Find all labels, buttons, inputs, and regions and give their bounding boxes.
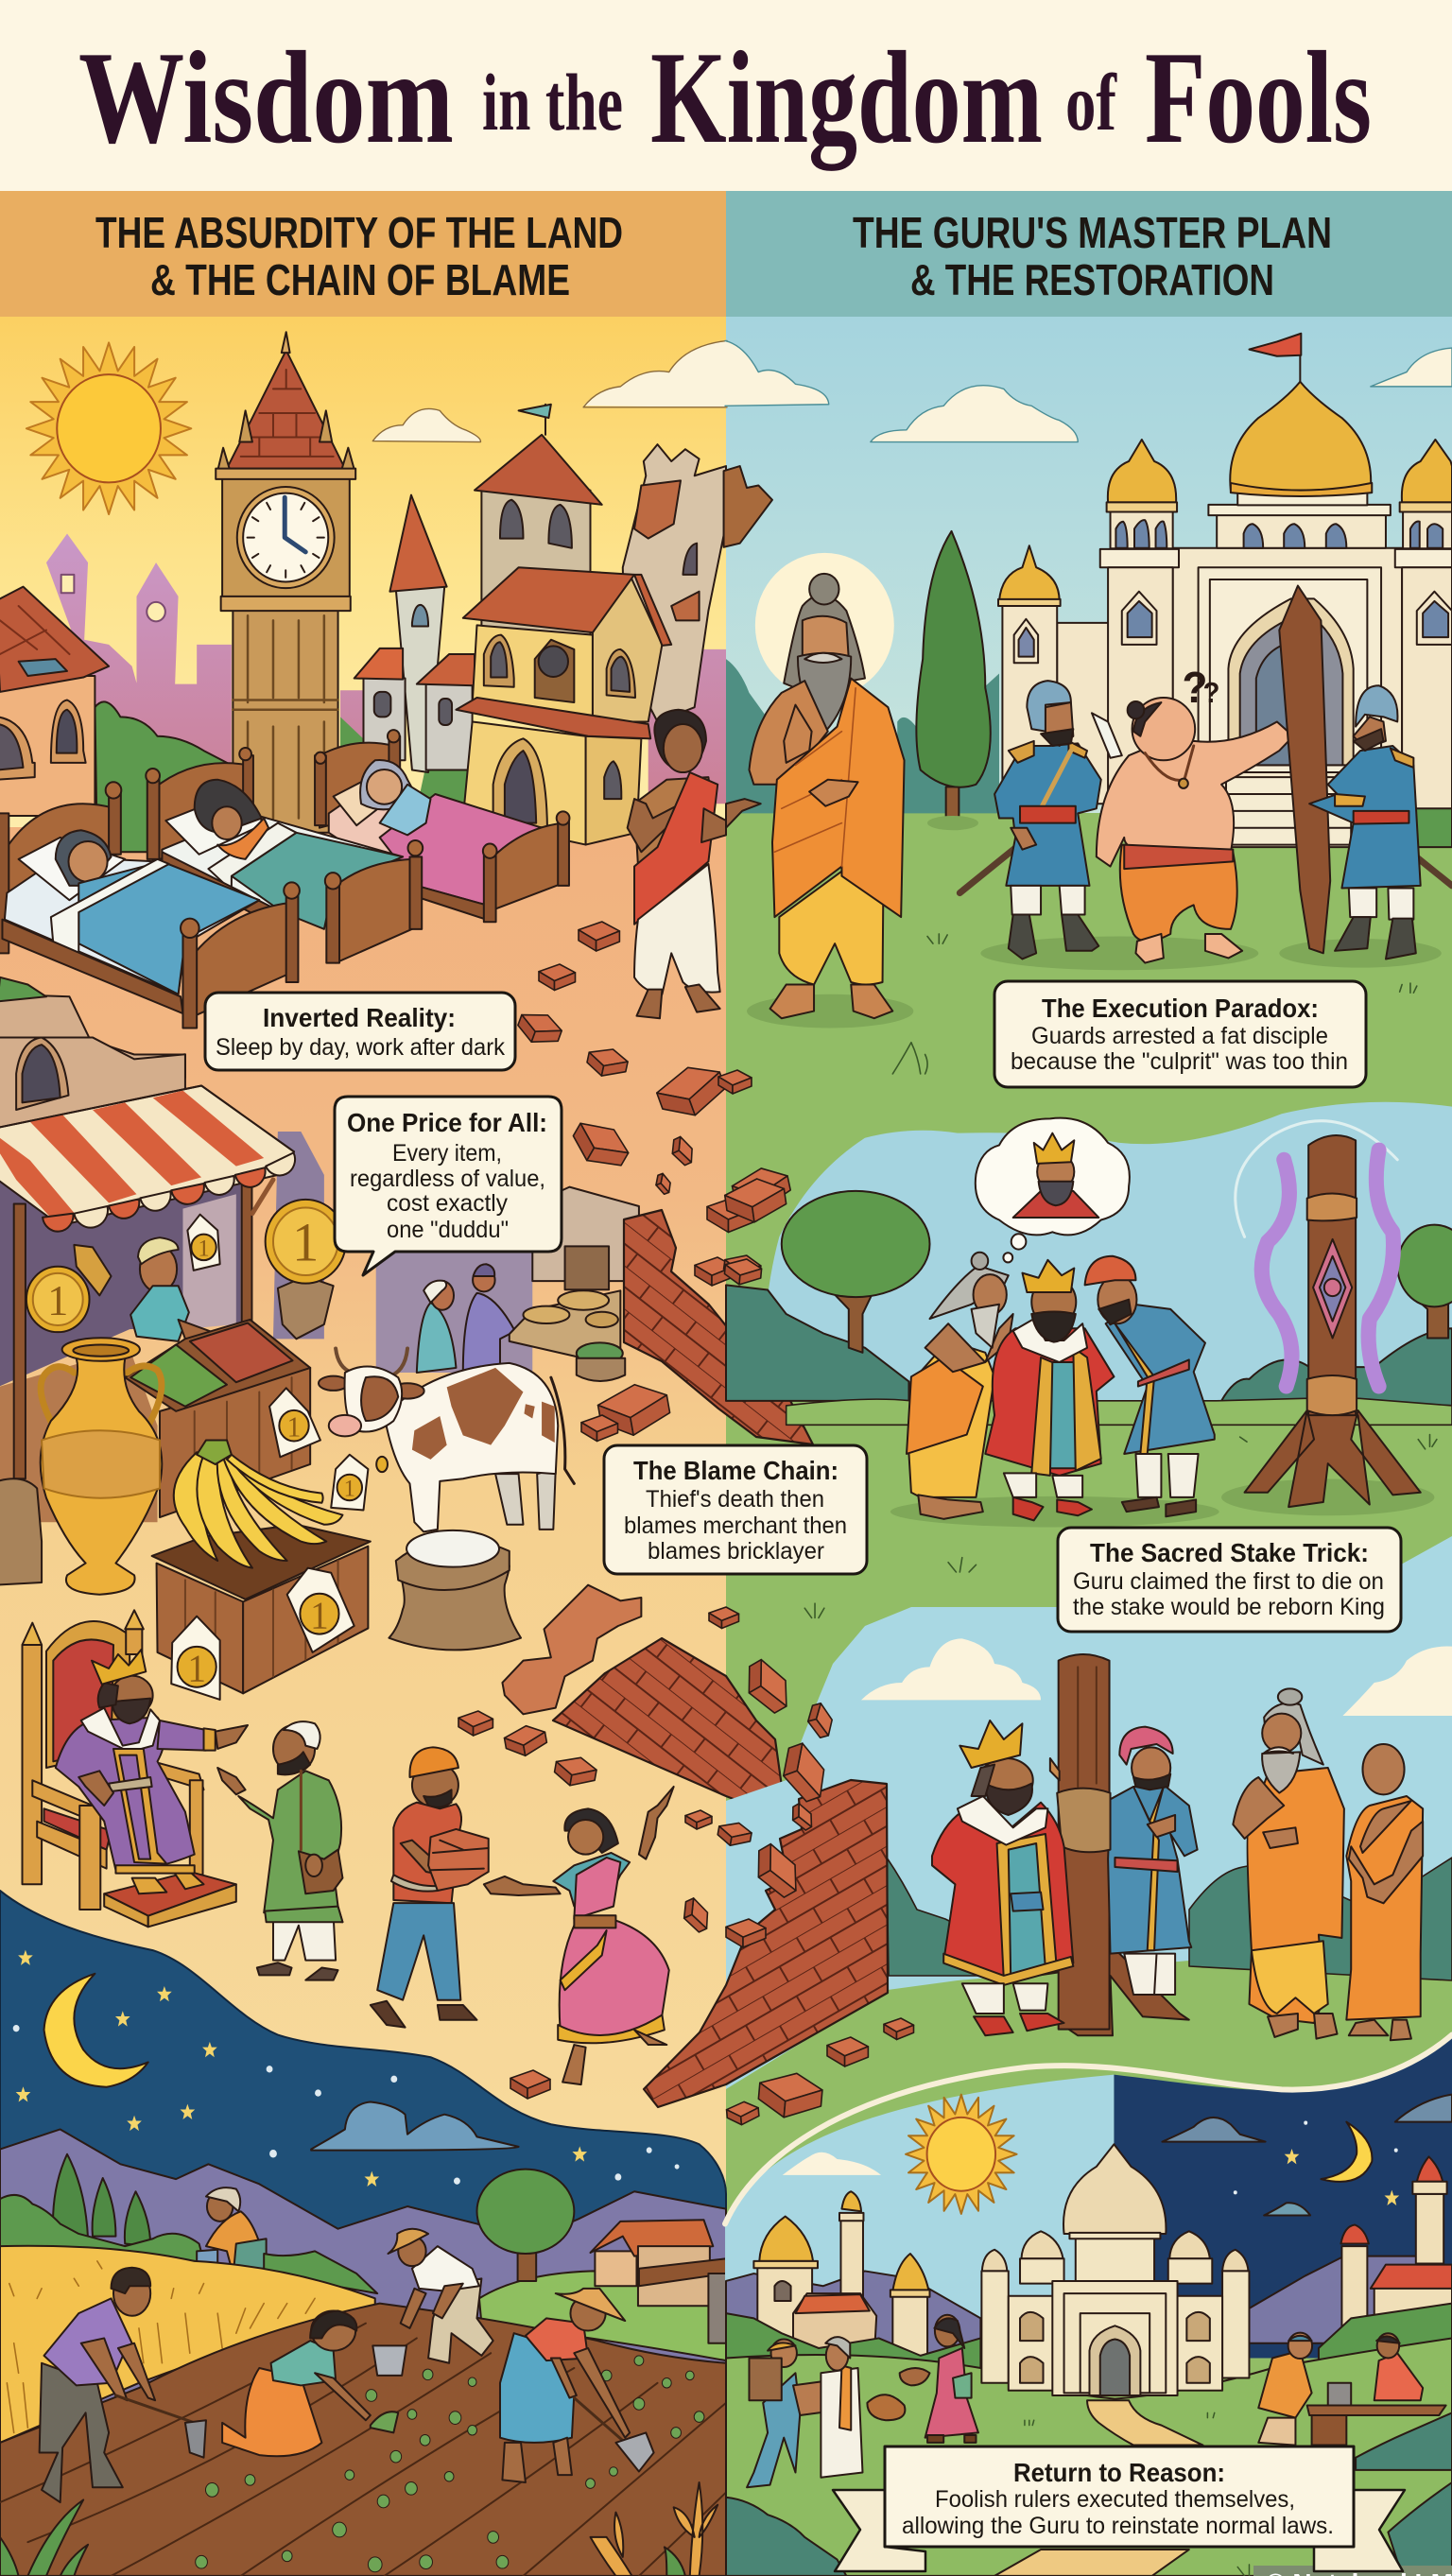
panel: night sky xyxy=(0,1891,726,2443)
guard right xyxy=(1309,685,1452,959)
panel: return to reason scene xyxy=(725,2035,1452,2576)
wall stall and people xyxy=(278,1187,639,1381)
price tag: counter: 1 xyxy=(287,1411,301,1444)
panel: left background ground xyxy=(0,827,726,2434)
right column header xyxy=(726,191,1452,317)
price tag: cow: 1 xyxy=(344,1476,355,1502)
brick wall lower xyxy=(644,1780,888,2107)
callout ribbon: return to reason: allowing the Guru to reinstate normal laws. xyxy=(902,2513,1334,2539)
price tag: crate left xyxy=(171,1616,220,1700)
price tag: hanging xyxy=(187,1215,220,1271)
farmer woman with hat xyxy=(500,2289,654,2482)
merchant coat hem xyxy=(265,1907,342,1922)
merchant in green xyxy=(217,1721,342,1922)
wheat field xyxy=(0,2246,375,2443)
callout ribbon: return to reason xyxy=(833,2446,1405,2571)
right column header: & THE RESTORATION xyxy=(910,255,1274,304)
callout: the blame chain: Thief's death then xyxy=(646,1486,824,1513)
icon: sun xyxy=(26,342,191,514)
day sky xyxy=(725,2075,1114,2358)
night clouds and stars xyxy=(1162,2095,1452,2216)
grass tufts xyxy=(804,1435,1437,1617)
cow xyxy=(319,1349,574,1531)
panel: sky with sacred stake xyxy=(763,1102,1452,1406)
foreground plants xyxy=(0,2482,717,2576)
panel: right background sky xyxy=(726,317,1452,813)
ruin wall xyxy=(0,1037,185,1136)
stars xyxy=(13,1950,680,2187)
icon: crescent moon xyxy=(44,1974,148,2087)
callout: one price for all: Every item, xyxy=(392,1140,502,1167)
bricks near the boundary xyxy=(717,1175,913,2126)
price tag: crate right xyxy=(287,1568,354,1652)
callout: inverted reality: Sleep by day, work after dark xyxy=(216,1034,505,1061)
coin: hanging small: 1 xyxy=(47,1276,68,1324)
green hill xyxy=(479,2271,726,2360)
fat disciple: ? xyxy=(1182,663,1207,712)
halo xyxy=(755,553,894,698)
price tag: hanging: 1 xyxy=(198,1236,210,1262)
sand path lower xyxy=(994,2550,1189,2576)
golden vase xyxy=(41,1338,162,1595)
fat disciple: ? xyxy=(1202,678,1219,709)
dancer lower and figures' lower parts xyxy=(257,1903,669,2084)
day cloud xyxy=(783,2152,881,2175)
callout: execution paradox: Guards arrested a fat disciple xyxy=(1031,1023,1328,1049)
town left xyxy=(753,2191,930,2368)
wheat strokes xyxy=(7,2261,315,2432)
panel: king on stake scene xyxy=(861,1638,1452,2040)
callout: one price for all: cost exactly xyxy=(387,1190,508,1217)
watermark xyxy=(1253,2566,1452,2576)
palace xyxy=(998,334,1452,847)
left column header: & THE CHAIN OF BLAME xyxy=(150,255,570,304)
title: Wisdom xyxy=(78,25,454,171)
divider curve xyxy=(725,2035,1452,2223)
king listening xyxy=(985,1260,1114,1520)
sacred stake xyxy=(1245,1135,1421,1507)
distant trees xyxy=(726,659,999,813)
king tied xyxy=(932,1720,1073,2035)
brick scatter left/central xyxy=(458,922,793,2099)
guru on right xyxy=(1233,1688,1344,2039)
grass tufts xyxy=(892,934,1417,1074)
panel: right background grass xyxy=(726,317,1452,2576)
title: Fools xyxy=(1145,25,1372,171)
panel: inverted reality scene xyxy=(0,332,727,1078)
callout: the blame chain: blames bricklayer xyxy=(648,1538,824,1565)
bananas xyxy=(174,1440,342,1568)
brick wall upper xyxy=(624,1210,813,1444)
forest xyxy=(0,2154,204,2261)
title band xyxy=(0,0,1452,191)
seated king xyxy=(56,1650,248,1893)
house left xyxy=(0,587,109,816)
callout: sacred stake trick xyxy=(1058,1528,1401,1632)
title: in the xyxy=(482,57,623,147)
bricklayer xyxy=(391,1747,489,1903)
throne xyxy=(23,1610,236,1927)
icon: moon xyxy=(1321,2122,1372,2182)
night cloud xyxy=(311,2102,519,2151)
callout: the blame chain: The Blame Chain: xyxy=(633,1456,838,1485)
tree xyxy=(476,2170,574,2281)
ruined tower xyxy=(623,444,726,721)
clouds xyxy=(725,340,1452,442)
thought bubble xyxy=(976,1118,1130,1262)
oak tree xyxy=(782,1191,930,1353)
callout: one price for all: one "duddu" xyxy=(387,1217,509,1243)
farmer background xyxy=(197,2187,267,2269)
crate under bananas xyxy=(152,1525,371,1693)
distant round window xyxy=(147,602,165,621)
hedge xyxy=(726,2304,1452,2393)
stall poles xyxy=(14,1175,273,1478)
sack of rice xyxy=(389,1530,521,1650)
produce counter xyxy=(125,1320,310,1517)
callout: execution paradox: The Execution Paradox: xyxy=(1042,994,1319,1023)
man in red sash xyxy=(628,710,726,1018)
hills behind stake group xyxy=(887,1858,1452,1980)
bed 3 xyxy=(315,730,569,922)
brick pile middle xyxy=(553,1638,782,1808)
callout ribbon: return to reason: Foolish rulers executed themselves, xyxy=(935,2486,1295,2513)
hills right xyxy=(1221,1328,1452,1406)
ropes xyxy=(1057,1789,1111,1852)
market back wall xyxy=(0,1132,532,1387)
hanging goods xyxy=(74,1245,112,1295)
price tag: crate left: 1 xyxy=(187,1647,206,1690)
bed 2 xyxy=(146,748,423,963)
seedlings xyxy=(196,2356,704,2572)
panel: second sky xyxy=(726,1536,1452,2089)
callout: inverted reality xyxy=(205,993,515,1070)
callout: execution paradox: because the "culprit" was too thin xyxy=(1011,1048,1348,1075)
callout ribbon: return to reason: Return to Reason: xyxy=(1013,2458,1225,2487)
ground shadow xyxy=(890,1478,1434,1528)
sack left xyxy=(0,1478,42,1585)
coin: large: 1 xyxy=(292,1213,319,1273)
panel: sacred stake trick scene xyxy=(726,1118,1452,1617)
taj palace xyxy=(981,2144,1249,2395)
distant window xyxy=(61,575,74,593)
disciple on right xyxy=(1346,1744,1423,2040)
hills left xyxy=(726,1285,908,1401)
crumbling brick clump xyxy=(502,1585,641,1714)
ground under stall xyxy=(0,1349,158,1522)
price tag: crate right: 1 xyxy=(310,1594,329,1637)
callout: execution paradox xyxy=(994,981,1366,1087)
dancing woman upper xyxy=(484,1787,674,1919)
clouds xyxy=(861,1638,1452,1716)
oak tree right xyxy=(1397,1225,1452,1339)
ground grass xyxy=(786,1398,1452,1425)
gray tower with flag xyxy=(475,405,602,635)
callout: the blame chain xyxy=(604,1445,867,1574)
cone tower and small house xyxy=(354,495,475,772)
stake xyxy=(1050,1654,1189,2035)
left column header: THE ABSURDITY OF THE LAND xyxy=(95,208,623,257)
grass tufts xyxy=(1025,2412,1249,2576)
callout: sacred stake trick: Guru claimed the first to die on xyxy=(1073,1568,1384,1595)
hedge xyxy=(264,2251,377,2293)
cypress tree xyxy=(916,531,991,828)
panel: execution paradox scene xyxy=(724,334,1452,1074)
guru xyxy=(749,574,905,1018)
purple aura xyxy=(1236,1121,1397,1387)
callout: sacred stake trick: the stake would be reborn King xyxy=(1073,1594,1385,1620)
clock tower xyxy=(216,332,355,833)
guard left xyxy=(959,681,1122,959)
panel: market scene xyxy=(0,1037,639,1700)
hut xyxy=(590,2220,726,2343)
title xyxy=(78,25,1372,171)
callout: inverted reality: Inverted Reality: xyxy=(263,1003,456,1032)
bush right xyxy=(1416,746,1452,847)
callout: the blame chain: blames merchant then xyxy=(624,1513,847,1539)
title: Kingdom xyxy=(650,25,1043,171)
price tag: cow xyxy=(331,1455,368,1510)
crumbling tower tip xyxy=(724,466,772,547)
mountains xyxy=(726,2256,1452,2358)
callout: sacred stake trick: The Sacred Stake Trick: xyxy=(1090,1538,1369,1567)
main yellow house xyxy=(456,567,671,845)
guru whispering xyxy=(907,1253,1013,1519)
plowed soil xyxy=(0,2304,726,2576)
farmer with hoe xyxy=(40,2268,206,2502)
panel: night farming scene xyxy=(0,1903,726,2576)
merchant xyxy=(130,1237,217,1341)
callout: one price for all: regardless of value, xyxy=(350,1166,545,1192)
kneeling woman xyxy=(222,2311,398,2456)
bed 1 xyxy=(0,782,300,1028)
right town xyxy=(1340,2156,1452,2341)
panel: left background sky xyxy=(0,317,726,865)
woman with basket xyxy=(900,2315,978,2443)
coin: hanging small xyxy=(26,1267,90,1332)
ruin bottom left xyxy=(0,977,185,1078)
mountains xyxy=(0,2129,726,2443)
wooden stake xyxy=(1279,586,1330,953)
fat disciple xyxy=(1097,663,1293,963)
price tag: counter xyxy=(269,1388,320,1457)
night sky xyxy=(1114,2037,1452,2358)
figures' lower parts xyxy=(265,1907,342,1922)
title: of xyxy=(1065,57,1117,147)
left column header xyxy=(0,191,726,317)
farmer in straw hat xyxy=(388,2229,493,2363)
rolling grass xyxy=(726,2338,1452,2576)
awning xyxy=(0,1085,295,1232)
townsfolk right at table xyxy=(1258,2333,1446,2446)
clouds xyxy=(372,340,727,442)
right column header: THE GURU'S MASTER PLAN xyxy=(853,208,1332,257)
sand path xyxy=(1087,2400,1202,2446)
townsfolk left xyxy=(747,2337,905,2487)
minister bending xyxy=(1085,1256,1215,1516)
bushes lower xyxy=(726,2412,1452,2576)
coin: large xyxy=(266,1200,346,1284)
bush right xyxy=(340,717,473,808)
grass shadows xyxy=(747,816,1442,1028)
bucket xyxy=(372,2345,406,2376)
callout: one price for all: One Price for All: xyxy=(347,1108,547,1137)
panel: king's court and chain of blame xyxy=(23,1585,674,1927)
distant purple skyline xyxy=(46,533,726,823)
icon: sun xyxy=(906,2095,1017,2214)
minister tied xyxy=(1108,1727,1198,1995)
soil furrows xyxy=(0,2324,726,2576)
callout: one price for all xyxy=(335,1097,562,1275)
grass hand xyxy=(726,799,761,828)
bushes xyxy=(95,701,232,852)
